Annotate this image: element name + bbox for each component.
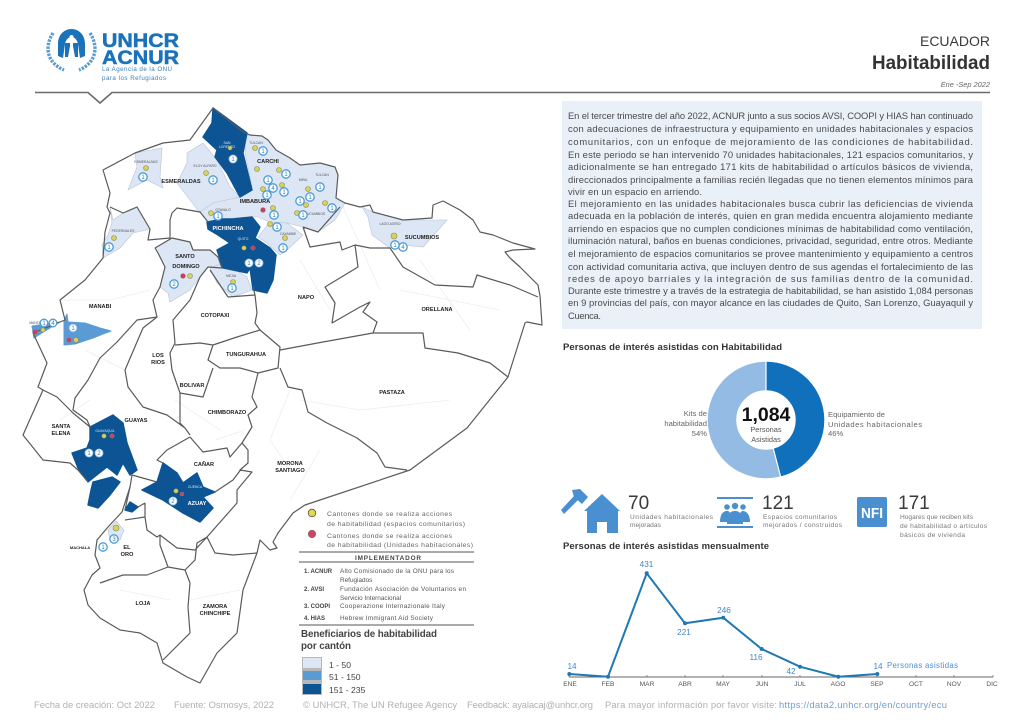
panel: narrative text	[562, 101, 982, 329]
line chart: AGO	[831, 681, 845, 688]
map legend: activity markers: de habitabilidad (Unidades habitacionales)	[327, 542, 473, 549]
line chart: 14	[567, 662, 577, 671]
canton labels: CUENCA	[188, 485, 203, 489]
heading: donut chart: Personas de interés asistidas con Habitabilidad	[563, 342, 782, 353]
implementers table: 3. COOPI	[304, 604, 330, 610]
marker numbers: 1	[230, 286, 234, 292]
icon: wreath and shelter emblem	[48, 29, 95, 70]
stat: community spaces: Espacios comunitarios	[763, 514, 838, 521]
donut chart: 46%	[828, 429, 843, 438]
marker numbers: 2	[171, 499, 175, 505]
panel: narrative text: arriendo en espacios que no cumplen condiciones mínimas de habitabilidad como ventilación,	[568, 223, 973, 234]
province boundaries	[23, 108, 542, 683]
stat: community spaces: 121	[762, 493, 794, 514]
panel: narrative text: En este periodo se han intervenido 70 unidades habitacionales, 121 espacios comunitarios, y	[568, 149, 973, 160]
province labels: MORONA	[277, 461, 303, 467]
implementers table: Alto Comisionado de la ONU para los	[340, 568, 454, 575]
stat: NFI kits	[857, 493, 988, 539]
map of Ecuador	[23, 108, 542, 683]
marker numbers: 4	[51, 321, 55, 327]
canton labels: ESMERALDAS	[134, 160, 158, 164]
panel: narrative text: con actividad comunitaria activa, que incluyen dentro de sus agendas el fortalecimiento de las	[568, 261, 973, 272]
marker numbers: 2	[97, 451, 101, 457]
choropleth legend: Beneficiarios de habitabilidad	[301, 629, 437, 640]
province labels: SANTIAGO	[275, 468, 305, 474]
line chart: 431	[640, 560, 654, 569]
stat: NFI kits: 171	[898, 493, 930, 514]
implementers table: 2. AVSI	[304, 587, 324, 593]
implementers table: Servicio Internacional	[340, 595, 401, 602]
country base	[23, 108, 542, 683]
marker numbers: 1	[272, 213, 276, 219]
heading: line chart: Personas de interés asistidas mensualmente	[563, 541, 769, 552]
marker numbers: 1	[308, 195, 312, 201]
stat: community spaces: mejorados / construidos	[763, 522, 843, 529]
canton labels: TULCAN	[315, 173, 329, 177]
panel: narrative text: Cuenca.	[568, 310, 601, 321]
stat: housing units	[561, 489, 714, 533]
logo wordmark: ACNUR	[102, 48, 179, 69]
panel: narrative text: El mejoramiento en las unidades habitacionales busca cubrir las deficiencias de vivienda	[568, 198, 974, 209]
marker numbers: 4	[271, 186, 275, 192]
choropleth legend	[301, 629, 437, 695]
province labels: CHIMBORAZO	[208, 410, 247, 416]
line chart: MAR	[640, 681, 655, 688]
panel: narrative text: direccionados principalmente a familias recién llegadas que no tienen elementos mínimos para	[568, 174, 974, 185]
canton labels: LAGO AGRIO	[379, 222, 401, 226]
canton labels	[29, 141, 401, 550]
canton labels: GUAYAQUIL	[95, 429, 115, 433]
implementers table: IMPLEMENTADOR	[355, 555, 421, 562]
line chart: JUN	[756, 681, 769, 688]
stat: housing units: 70	[628, 493, 649, 514]
province labels: ORELLANA	[421, 307, 453, 313]
marker numbers: 1	[275, 225, 279, 231]
province labels: CHINCHIPE	[200, 611, 231, 617]
fill: medium blue cantons	[32, 314, 111, 345]
fill: light blue cantons	[102, 135, 447, 540]
title block: Ene -Sep 2022	[941, 80, 990, 89]
footer: Fuente: Osmosys, 2022	[174, 699, 274, 710]
province labels: ORO	[121, 552, 134, 558]
line chart: 42	[786, 667, 796, 676]
donut chart: 54%	[692, 429, 707, 438]
province labels: COTOPAXI	[201, 313, 230, 319]
footer: https://data2.unhcr.org/en/country/ecu	[779, 699, 947, 710]
canton labels: SAN	[224, 141, 231, 145]
province labels: AZUAY	[188, 501, 207, 507]
panel: narrative text: En el tercer trimestre del año 2022, ACNUR junto a sus socios AVSI, COOPI y HIAS han continuado	[568, 110, 973, 121]
footer: Para mayor información por favor visite:	[605, 699, 777, 710]
province labels: GUAYAS	[125, 418, 148, 424]
implementers table: Hebrew Immigrant Aid Society	[340, 615, 434, 622]
province labels: EL	[123, 545, 131, 551]
icon: NFI: NFI	[861, 505, 883, 522]
line chart	[563, 560, 998, 688]
marker numbers: 1	[231, 157, 235, 163]
choropleth legend: por cantón	[301, 641, 351, 652]
canton labels: QUITO	[238, 237, 249, 241]
canton labels: ELOY ALFARO	[193, 164, 217, 168]
province labels	[52, 159, 453, 617]
canton labels: MANTA	[29, 321, 42, 325]
marker numbers: 1	[71, 326, 75, 332]
province labels: SANTO	[175, 254, 195, 260]
icon: people	[717, 497, 753, 528]
province labels: BOLIVAR	[180, 383, 204, 389]
panel: narrative text: adicionalmente se han entregado 171 kits de habitabilidad o artículos básicos de vivienda,	[568, 161, 973, 172]
choropleth legend: 1 - 50	[329, 660, 351, 670]
logo wordmark: para los Refugiados	[102, 75, 166, 82]
footer: Fecha de creación: Oct 2022	[34, 699, 155, 710]
marker numbers: 4	[401, 245, 405, 251]
province labels: CARCHI	[257, 159, 279, 165]
map legend: activity markers: Cantones donde se realiza acciones	[327, 533, 453, 540]
title block	[872, 33, 990, 89]
icon: hammer and house	[561, 489, 620, 533]
donut chart: Personas	[750, 425, 782, 434]
line chart: 246	[717, 606, 731, 615]
line chart: 116	[749, 653, 763, 662]
logo: UNHCR ACNUR	[48, 29, 179, 82]
province labels: PASTAZA	[379, 390, 405, 396]
implementers table	[299, 552, 474, 625]
line chart: SEP	[870, 681, 884, 688]
canton labels: LORENZO	[219, 145, 236, 149]
marker numbers: 3	[112, 537, 116, 543]
donut chart: 1,084	[742, 404, 791, 426]
stat: housing units: mejoradas	[630, 522, 661, 529]
choropleth legend: 51 - 150	[329, 672, 361, 682]
logo wordmark: La Agencia de la ONU	[102, 66, 172, 73]
stat: community spaces	[717, 493, 843, 529]
fill: dark blue cantons	[72, 108, 276, 522]
line chart: OCT	[909, 681, 923, 688]
province labels: PICHINCHA	[212, 226, 244, 232]
canton labels: SUCUMBIOS	[305, 212, 326, 216]
logo wordmark	[102, 31, 179, 82]
panel: narrative text: vivir en un espacio en arriendo.	[568, 186, 702, 197]
province labels: ZAMORA	[203, 604, 227, 610]
province labels: RIOS	[151, 360, 165, 366]
line chart: FEB	[602, 681, 615, 688]
canton labels: MACHALA	[70, 545, 90, 550]
donut chart: habitabilidad	[664, 419, 707, 428]
marker numbers: 1	[107, 245, 111, 251]
stat: NFI kits: Hogares que reciben kits	[900, 514, 974, 521]
line chart: ENE	[563, 681, 577, 688]
markers: partner circles on light cantons	[40, 147, 407, 551]
stat: housing units: Unidades habitacionales	[630, 514, 714, 521]
donut chart: Equipamiento de	[828, 410, 885, 419]
marker numbers: 1	[318, 185, 322, 191]
marker numbers: 1	[261, 149, 265, 155]
canton labels: MIRA	[299, 178, 308, 182]
map legend: activity markers	[308, 509, 473, 549]
stat: NFI kits: básicos de vivienda	[900, 532, 965, 539]
choropleth legend: 151 - 235	[329, 685, 366, 695]
province labels: SANTA	[52, 424, 70, 430]
marker numbers: 1	[87, 451, 91, 457]
panel: narrative text: en 9 provincias del país, con mayor alcance en las ciudades de Quito, San Lorenzo, Guayaquil y	[568, 297, 973, 308]
province labels: ESMERALDAS	[161, 179, 201, 185]
marker numbers: 1	[393, 243, 397, 249]
marker numbers: 1	[247, 261, 251, 267]
markers: red, housing units	[32, 208, 266, 496]
implementers table: 1. ACNUR	[304, 569, 333, 575]
donut chart	[664, 361, 922, 477]
canton labels: OTAVALO	[215, 208, 231, 212]
donut chart: Kits de	[684, 409, 707, 418]
line chart: 14	[873, 662, 883, 671]
panel: narrative text: iluminación natural, baños en buenas condiciones, privacidad, seguridad, entre otros. Mediante	[568, 235, 973, 246]
canton labels: TULCAN	[249, 141, 263, 145]
implementers table: Cooperazione Internazionale Italy	[340, 603, 446, 610]
marker numbers: 2	[172, 282, 176, 288]
marker numbers	[42, 149, 405, 551]
marker numbers: 2	[257, 261, 261, 267]
marker numbers: 1	[301, 213, 305, 219]
donut chart: Unidades habitacionales	[828, 420, 922, 429]
map legend: activity markers: Cantones donde se realiza acciones	[327, 511, 453, 518]
line chart: JUL	[794, 681, 806, 688]
province labels: IMBABURA	[240, 199, 270, 205]
province labels: LOS	[152, 353, 164, 359]
logo wordmark: UNHCR	[102, 31, 179, 52]
panel: narrative text: el mejoramiento de espacios comunitarios se provee mantenimiento y equipamiento a centros	[568, 248, 973, 259]
canton labels: PEDERNALES	[112, 229, 135, 233]
province labels: LOJA	[136, 601, 150, 607]
marker numbers: 1	[266, 178, 270, 184]
panel: narrative text: con adecuaciones de infraestructura y equipamiento en unidades habitacionales y espacios	[568, 123, 973, 134]
marker numbers: 1	[42, 321, 46, 327]
line chart: ABR	[678, 681, 692, 688]
marker numbers: 1	[282, 190, 286, 196]
map legend: activity markers: de habitabilidad (espacios comunitarios)	[327, 521, 465, 528]
canton labels: CAYAMBE	[280, 232, 297, 236]
line chart: NOV	[947, 681, 962, 688]
province labels: DOMINGO	[172, 264, 200, 270]
canton boundaries	[60, 200, 500, 600]
stat: NFI kits: de habitabilidad o artículos	[900, 523, 988, 530]
panel: narrative text: comunitarios, con un enfoque de mejoramiento de las condiciones de habitabilidad.	[568, 136, 973, 147]
footer: © UNHCR, The UN Refugee Agency	[303, 699, 457, 710]
province labels: ELENA	[52, 431, 70, 437]
header rule with notch	[35, 92, 990, 103]
panel: narrative text: Durante este trimestre y a través de la estrategia de habitabilidad, se han asistido 1,084 personas	[568, 285, 973, 296]
line chart: Personas asistidas	[887, 661, 958, 670]
implementers table: Fundación Asociación de Voluntarios en	[340, 586, 466, 593]
marker numbers: 1	[101, 545, 105, 551]
title block: ECUADOR	[920, 33, 990, 49]
province labels: NAPO	[298, 295, 315, 301]
line chart: 221	[677, 628, 691, 637]
panel: narrative text: adecuada en la población de interés, quien en gran medida encuentra alojamiento mediante	[568, 210, 973, 221]
canton labels: MEJIA	[226, 274, 237, 278]
province labels: SUCUMBIOS	[405, 235, 439, 241]
province labels: TUNGURAHUA	[226, 352, 266, 358]
title block: Habitabilidad	[872, 53, 990, 74]
line chart: MAY	[716, 681, 730, 688]
marker numbers: 1	[330, 206, 334, 212]
marker numbers: 1	[141, 175, 145, 181]
panel: narrative text: redes de apoyo barriales y la integración de sus familias dentro de la comunidad.	[568, 273, 973, 284]
marker numbers: 1	[298, 199, 302, 205]
marker numbers: 1	[216, 214, 220, 220]
footer: Feedback: ayalacaj@unhcr.org	[467, 699, 593, 710]
marker numbers: 1	[211, 178, 215, 184]
footer	[34, 699, 947, 710]
donut chart: Asistidas	[751, 435, 781, 444]
marker numbers: 1	[265, 193, 269, 199]
markers: partner circles on dark cantons	[69, 155, 263, 505]
province labels: CAÑAR	[194, 461, 214, 468]
implementers table: 4. HIAS	[304, 616, 325, 622]
markers: yellow, communal spaces	[41, 146, 397, 531]
marker numbers: 1	[284, 172, 288, 178]
implementers table: Refugiados	[340, 577, 372, 584]
marker numbers: 1	[281, 246, 285, 252]
line chart: DIC	[986, 681, 998, 688]
province labels: MANABI	[89, 304, 112, 310]
